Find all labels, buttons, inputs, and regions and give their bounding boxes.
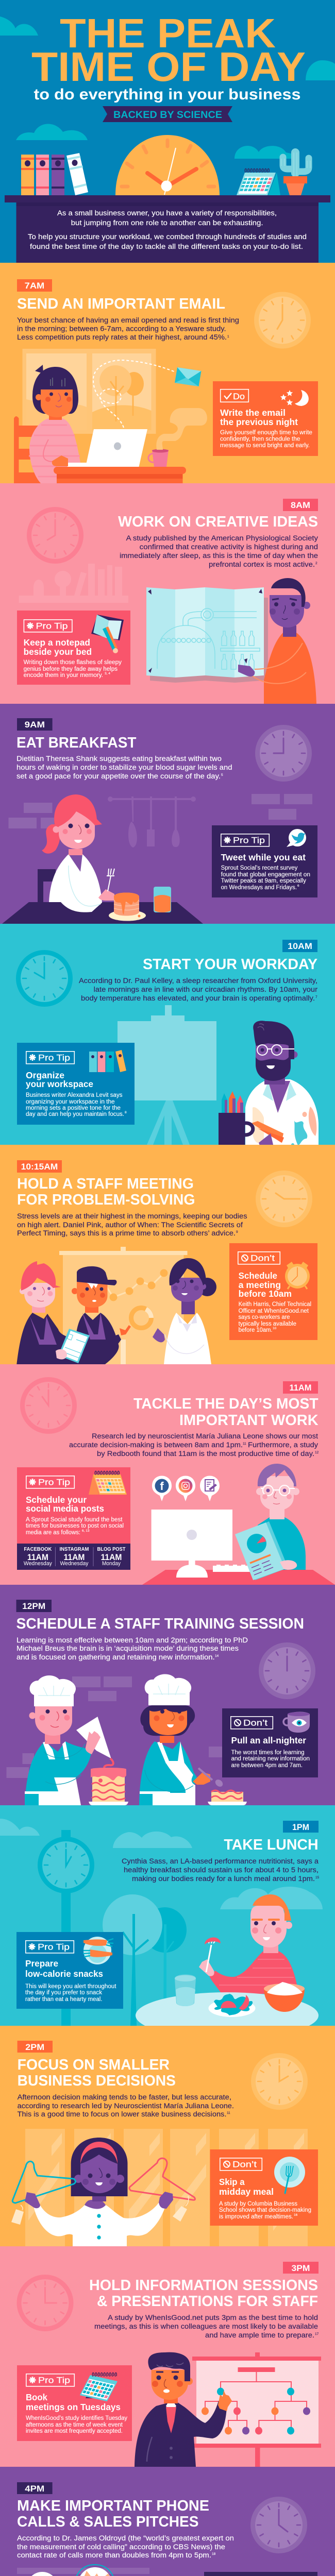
pro tip callout: your workspace xyxy=(26,1079,93,1089)
body text: 12 xyxy=(315,1451,319,1454)
pro tip callout: 6, 13 xyxy=(82,1529,90,1533)
do callout: Give yourself enough time to write xyxy=(220,430,312,436)
clock xyxy=(259,1642,315,1699)
cactus plant xyxy=(281,148,310,195)
heading xyxy=(17,2498,209,2530)
small cake xyxy=(208,1790,247,1805)
body text xyxy=(16,1636,248,1661)
heading xyxy=(133,1396,319,1429)
heading: WORK ON CREATIVE IDEAS xyxy=(118,514,318,530)
time tag xyxy=(17,279,52,292)
body text: 2 xyxy=(315,562,317,565)
body text: Learning is most effective between 10am and 2pm; according to PhD xyxy=(16,1636,248,1644)
body text: Less competition puts reply rates at their highest, around 45%. xyxy=(17,333,227,341)
desk and laptop xyxy=(52,408,207,483)
heading: TACKLE THE DAY’S MOST xyxy=(133,1396,319,1412)
don't callout: Officer at WhenIsGood.net xyxy=(239,1308,309,1314)
body text: According to Dr. Paul Kelley, a sleep researcher from Oxford University, xyxy=(79,977,317,985)
schedule table: FACEBOOK xyxy=(24,1547,52,1552)
desk xyxy=(5,195,330,263)
body text: This is a good time to focus on lower stake business decisions. xyxy=(18,2110,226,2118)
pro tip callout: Book xyxy=(26,2392,47,2402)
panel: 7AM send an email xyxy=(0,263,335,483)
don't callout xyxy=(229,1243,317,1340)
stopwatch clock on post xyxy=(38,1830,94,2026)
body text xyxy=(79,977,318,1002)
whiteboard xyxy=(118,1005,216,1145)
time tag xyxy=(17,2482,53,2494)
desk and monitor xyxy=(142,1510,335,1585)
heading: IMPORTANT WORK xyxy=(179,1412,319,1429)
pro tip callout: Organize xyxy=(26,1070,64,1080)
panel: 10:15AM staff meeting xyxy=(0,1145,335,1376)
body text: A study published by the American Physiological Society xyxy=(126,534,318,542)
schedule table: 11AM xyxy=(27,1553,48,1562)
heading: CALLS & SALES PITCHES xyxy=(17,2514,199,2530)
kitchen wall xyxy=(8,794,312,828)
body text: Stress levels are at their highest in the mornings, keeping our bodies xyxy=(17,1212,247,1220)
don't callout: Don’t xyxy=(232,2160,257,2169)
body text: Dietitian Theresa Shank suggests eating breakfast within two xyxy=(16,755,222,762)
body text: A study by WhenIsGood.net puts 3pm as the best time to hold xyxy=(108,2314,318,2321)
pro tip callout: the day if you prefer to snack xyxy=(25,1990,102,1996)
pro tip callout xyxy=(17,1467,130,1570)
pro tip callout: times for businesses to post on social xyxy=(26,1523,124,1529)
pull all-nighter callout: Don’t xyxy=(243,1718,267,1728)
body text: 7 xyxy=(315,995,317,999)
calendar xyxy=(237,168,280,195)
panel: 3PM presentations xyxy=(0,2246,335,2467)
body text: 11 xyxy=(243,1442,246,1446)
time tag xyxy=(283,1821,319,1833)
schedule table: 11AM xyxy=(64,1553,85,1562)
pro tip callout: Pro Tip xyxy=(38,2375,70,2385)
time tag: 1PM xyxy=(292,1823,309,1832)
dashed email path xyxy=(93,360,175,428)
pro tip callout: on Wednesdays and Fridays. xyxy=(221,885,297,891)
heading: START YOUR WORKDAY xyxy=(143,956,317,973)
pull all-nighter callout xyxy=(222,1708,318,1777)
schedule table: Wednesday xyxy=(60,1561,89,1567)
twitter icon xyxy=(287,829,306,847)
body text: 5 xyxy=(221,773,223,777)
pull all-nighter callout: The worst times for learning xyxy=(231,1750,305,1756)
body text xyxy=(16,755,232,780)
pro tip callout: A Sprout Social study found the best xyxy=(26,1517,123,1523)
time tag: 11AM xyxy=(290,1383,311,1393)
heading: BUSINESS DECISIONS xyxy=(18,2073,176,2089)
clock xyxy=(255,725,312,782)
do callout xyxy=(213,381,318,456)
schedule table: INSTAGRAM xyxy=(60,1547,89,1552)
shopper with hangers xyxy=(11,2138,195,2246)
panel: 2PM smaller decisions xyxy=(0,2026,335,2246)
pro tip callout: Tweet while you eat xyxy=(221,852,306,862)
title xyxy=(31,10,306,90)
person two xyxy=(56,1266,131,1370)
don't callout: before 10am. xyxy=(239,1327,272,1333)
don't callout: is improved after mealtimes. xyxy=(219,2214,293,2220)
carrots icon xyxy=(83,1937,113,1964)
pro tip callout: encode them in your memory. xyxy=(24,672,103,679)
calendar icon xyxy=(80,2372,118,2401)
salesperson with headset xyxy=(22,2565,119,2576)
pro tip callout: Keep a notepad xyxy=(24,637,90,648)
body text: 14 xyxy=(215,1654,219,1658)
clock xyxy=(27,507,83,564)
don't callout: 16 xyxy=(294,2213,298,2217)
ribbon: BACKED BY SCIENCE xyxy=(113,110,222,121)
panel: 12PM staff training xyxy=(0,1585,335,1805)
intro text xyxy=(28,209,307,250)
pro tip callout: media are as follows: xyxy=(26,1530,80,1536)
don't callout xyxy=(210,2149,318,2226)
chef two xyxy=(139,1674,224,1805)
speech bubble with dollar xyxy=(27,2572,59,2576)
body text: 9 xyxy=(236,1230,238,1234)
time tag: 2PM xyxy=(25,2043,44,2052)
don't callout xyxy=(204,2572,317,2576)
window scene xyxy=(23,349,156,434)
pro tip callout xyxy=(212,825,317,897)
body text xyxy=(94,2314,319,2339)
social bubbles: f xyxy=(160,1480,164,1493)
pro tip callout: meetings on Tuesdays xyxy=(26,2402,121,2412)
heading: MAKE IMPORTANT PHONE xyxy=(17,2498,209,2514)
clock xyxy=(20,1377,77,1434)
person three xyxy=(153,1258,216,1364)
body text: Cynthia Sass, an LA-based performance nutritionist, says a xyxy=(122,1857,319,1865)
trees xyxy=(103,1894,187,2026)
pro tip callout: Pro Tip xyxy=(38,1478,70,1487)
pro tip callout: Schedule your xyxy=(26,1495,87,1505)
schedule table: 11AM xyxy=(101,1553,122,1562)
person one xyxy=(15,1261,121,1376)
do badge: Do xyxy=(233,392,245,401)
pro tip callout: Twitter peaks at 9am, especially xyxy=(221,878,306,884)
team of three xyxy=(15,1258,216,1376)
heading: SEND AN IMPORTANT EMAIL xyxy=(17,296,225,312)
pro tip callout: morning sets a positive tone for the xyxy=(26,1105,121,1111)
don't callout: School shows that decision-making xyxy=(219,2207,311,2213)
intro text: As a small business owner, you have a variety of responsibilities, xyxy=(57,209,277,217)
body text: and is focused on gathering and retaining new information. xyxy=(16,1653,215,1661)
header panel xyxy=(0,0,335,263)
time tag xyxy=(18,2041,53,2053)
time tag xyxy=(16,1600,52,1612)
man holding blueprint xyxy=(238,578,316,704)
time tag xyxy=(282,940,317,952)
presenter xyxy=(135,2352,232,2467)
intro text: To help you structure your workload, we combed through hundreds of studies and xyxy=(28,233,307,241)
body text: confirmed that creative activity is highest during and xyxy=(140,543,318,551)
man eating xyxy=(199,1894,299,1994)
don't callout: typically less available xyxy=(239,1321,296,1327)
panel: 9AM eat breakfast xyxy=(0,704,335,924)
table and woman xyxy=(2,794,203,924)
pro tip callout: 8 xyxy=(125,1111,127,1114)
body text: Afternoon decision making tends to be faster, but less accurate, xyxy=(18,2093,231,2101)
body text: in the morning; between 6-7am, according to a Yesware study. xyxy=(17,325,226,333)
moon and stars xyxy=(280,390,309,406)
body text: 11 xyxy=(227,2111,230,2115)
subtitle: to do everything in your business xyxy=(34,86,301,103)
body text xyxy=(122,1857,320,1883)
body text: according to research led by Neuroscientist María Juliana Leone. xyxy=(18,2102,234,2110)
panel: 10AM start workday xyxy=(0,924,335,1157)
don't callout: 10 xyxy=(273,1327,277,1330)
body text: According to Dr. James Oldroyd (the “world’s greatest expert on xyxy=(17,2534,234,2542)
clouds xyxy=(0,16,335,159)
pro tip callout: Writing down those flashes of sleepy xyxy=(24,659,122,666)
body text: accurate decision-making is between 8am and 1pm. xyxy=(69,1441,243,1449)
time tag xyxy=(17,1160,62,1173)
body text: 17 xyxy=(315,2332,319,2336)
pro tip callout xyxy=(17,1043,135,1125)
clock xyxy=(250,2497,307,2553)
layer cake xyxy=(89,1768,128,1805)
heading xyxy=(18,2057,176,2089)
salad xyxy=(208,1994,256,2017)
clock xyxy=(256,1171,312,1227)
man with report xyxy=(235,1464,306,1580)
intro text: found the best time of the day to tackle all the different tasks on your to-do list. xyxy=(30,243,303,250)
don't callout: Skip a xyxy=(219,2177,245,2187)
heading: FOR PROBLEM-SOLVING xyxy=(17,1192,195,1208)
time tag: 4PM xyxy=(25,2484,44,2494)
pancakes and juice xyxy=(109,887,171,921)
body text: body temperature has elevated, and your brain is operating optimally. xyxy=(81,994,315,1002)
body text: Your best chance of having an email opened and read is first thing xyxy=(17,316,239,324)
chef one xyxy=(25,1675,113,1805)
body text: on high alert. Daniel Pink, author of When: The Scientific Secrets of xyxy=(17,1221,243,1229)
pro tip callout: Business writer Alexandra Levit says xyxy=(26,1092,123,1098)
time tag: 8AM xyxy=(291,501,310,510)
artist with mug xyxy=(219,1021,319,1157)
body text xyxy=(17,316,239,341)
time tag: 7AM xyxy=(25,281,44,291)
don't callout: before 10am xyxy=(239,1289,292,1299)
chair xyxy=(14,416,41,483)
body text xyxy=(69,1432,319,1458)
title: TIME OF DAY xyxy=(31,44,306,90)
don't callout: Keith Harris, Chief Technical xyxy=(239,1301,311,1308)
body text: Research led by neuroscientist María Juliana Leone shows our most xyxy=(92,1432,318,1440)
intro text: but jumping from one role to another can be exhausting. xyxy=(71,219,263,227)
body text: Perfect Timing, says this is a prime time to absorb others’ advice. xyxy=(17,1229,236,1237)
lunch table xyxy=(136,1974,319,2039)
body text: Michael Breus the brain is in ‘acquisition mode’ during these times xyxy=(16,1645,239,1652)
time tag: 3PM xyxy=(292,2264,310,2273)
body text: and have ample time to prepare. xyxy=(205,2331,314,2339)
pro tip callout xyxy=(16,1932,123,2009)
heading: & PRESENTATIONS FOR STAFF xyxy=(97,2293,318,2310)
body text: 1 xyxy=(227,335,229,338)
pro tip callout: genius before they fade away helps xyxy=(24,666,118,672)
brick wall xyxy=(6,1676,222,1778)
clock xyxy=(16,950,73,1007)
panel: 4PM phone calls xyxy=(0,2467,335,2576)
pull all-nighter callout: and retaining new information xyxy=(231,1756,310,1762)
don't callout: says co-workers are xyxy=(239,1314,290,1320)
body text: 18 xyxy=(212,2552,216,2556)
pro tip callout: rather than eat a hearty meal. xyxy=(25,1996,102,2003)
heading: SCHEDULE A STAFF TRAINING SESSION xyxy=(16,1616,304,1632)
pro tip callout: social media posts xyxy=(26,1503,104,1514)
hanging utensils xyxy=(108,796,196,848)
pro tip callout: Pro Tip xyxy=(36,621,68,631)
body text: contact rate of calls more than doubles from 4pm to 5pm. xyxy=(17,2551,211,2559)
pro tip callout: low-calorie snacks xyxy=(25,1969,103,1979)
don't callout: a meeting xyxy=(239,1280,281,1290)
pro tip callout: This will keep you alert throughout xyxy=(25,1984,116,1990)
body text xyxy=(17,1212,247,1237)
pull all-nighter callout: Pull an all-nighter xyxy=(231,1735,306,1745)
pro tip callout: Pro Tip xyxy=(233,836,265,845)
don't callout: A study by Columbia Business xyxy=(219,2201,297,2207)
do badge xyxy=(221,389,248,402)
pro tip callout: invites are most frequently accepted. xyxy=(26,2428,123,2434)
time tag: 10:15AM xyxy=(21,1162,58,1172)
desk clock xyxy=(115,135,220,195)
heading xyxy=(17,1176,195,1208)
pro tip callout xyxy=(17,611,130,685)
time tag xyxy=(283,499,318,511)
pro tip callout: Prepare xyxy=(25,1958,58,1969)
time tag xyxy=(283,2262,319,2274)
title: THE PEAK xyxy=(60,10,276,56)
body text: healthy breakfast should sustain us for about 4 to 5 hours, xyxy=(124,1866,319,1874)
body text: immediately after sleep, as this is the time of day when the xyxy=(120,552,318,560)
panel: 1PM take lunch xyxy=(0,1805,335,2039)
alarm clock icon xyxy=(285,1262,310,1289)
notepad icon xyxy=(91,615,124,653)
do callout: Write the email xyxy=(220,408,286,418)
pro tip callout: Pro Tip xyxy=(38,1942,70,1952)
presentation screen xyxy=(59,1247,188,1364)
body text: by Redbooth found that 11am is the most productive time of day. xyxy=(97,1450,314,1458)
body text xyxy=(18,2093,234,2118)
schedule table: Wednesday xyxy=(24,1561,52,1567)
pro tip callout: organizing your workspace in the xyxy=(26,1099,115,1105)
pull all-nighter callout: are between 4pm and 7am. xyxy=(231,1762,303,1769)
do callout: confidently, then schedule the xyxy=(220,436,300,442)
time tag: 10AM xyxy=(288,942,312,951)
body text: late mornings are in line with our circadian rhythms. By 10am, your xyxy=(94,986,318,993)
don't callout: Don’t xyxy=(250,1253,275,1263)
envelope xyxy=(175,367,201,386)
pro tip callout: day and can help you maintain focus. xyxy=(26,1111,124,1117)
water glass xyxy=(175,1974,196,2006)
schedule table xyxy=(17,1544,130,1570)
clock xyxy=(251,2053,308,2110)
shop windows xyxy=(25,2129,308,2246)
pro tip callout: Sprout Social’s recent survey xyxy=(221,865,298,871)
clouds xyxy=(0,1819,323,1909)
heading: EAT BREAKFAST xyxy=(16,735,137,751)
don't callout: midday meal xyxy=(219,2187,274,2197)
pro tip callout: 3, 4 xyxy=(105,672,110,675)
pro tip callout: Pro Tip xyxy=(38,1053,70,1062)
body text: hours of waking in order to stabilize your blood sugar levels and xyxy=(16,764,232,771)
panel: 8AM creative ideas xyxy=(0,483,335,704)
body text xyxy=(17,2534,234,2559)
schedule table: Monday xyxy=(102,1561,121,1567)
books icon xyxy=(89,1050,126,1072)
woman at laptop xyxy=(29,365,88,483)
heading: HOLD A STAFF MEETING xyxy=(17,1176,194,1192)
body text: set a good pace for your appetite over the course of the day. xyxy=(16,772,221,780)
body text: prefrontal cortex is most active. xyxy=(209,561,315,568)
background shelf xyxy=(19,564,128,603)
cup icon xyxy=(283,1711,310,1733)
body text xyxy=(120,534,318,568)
body text: 15 xyxy=(315,1876,320,1879)
heading: TAKE LUNCH xyxy=(224,1837,319,1853)
hangers xyxy=(12,2158,195,2210)
body text: meetings, as this is when colleagues are most likely to be available xyxy=(94,2323,318,2330)
pro tip callout: afternoons as the time of week event xyxy=(26,2422,123,2428)
pro tip callout: 6 xyxy=(297,884,299,888)
heading xyxy=(89,2277,318,2310)
background blinds xyxy=(17,2568,149,2576)
body text: the measurement of cold calling” according to CBS News) the xyxy=(17,2543,225,2551)
clock xyxy=(16,2275,73,2331)
books xyxy=(21,153,88,195)
ribbon xyxy=(103,106,232,122)
plate and fork icon xyxy=(274,2157,305,2193)
body text: Furthermore, a study xyxy=(248,1441,318,1449)
pro tip callout: found that global engagement on xyxy=(221,872,310,878)
do callout: message to send bright and early. xyxy=(220,443,310,449)
panel: 11AM important work xyxy=(0,1364,335,1585)
time tag: 9AM xyxy=(25,720,45,730)
don't callout: Schedule xyxy=(239,1270,277,1281)
heading: FOCUS ON SMALLER xyxy=(18,2057,170,2073)
blueprint xyxy=(146,587,268,683)
do callout: the previous night xyxy=(220,417,298,427)
time tag: 12PM xyxy=(22,1602,45,1611)
social bubbles xyxy=(152,1476,220,1501)
heading: HOLD INFORMATION SESSIONS xyxy=(89,2277,318,2294)
schedule table: BLOG POST xyxy=(97,1547,126,1552)
calendar icon xyxy=(89,1471,127,1495)
rice bowl xyxy=(264,1982,305,2012)
pro tip callout: WhenIsGood’s study identifies Tuesday xyxy=(26,2415,127,2421)
clock xyxy=(254,292,311,348)
pro tip callout xyxy=(17,2365,132,2441)
time tag xyxy=(17,718,53,731)
org chart board xyxy=(192,2352,321,2467)
body text: making our bodies ready for a lunch meal around 1pm. xyxy=(132,1875,315,1883)
pro tip callout: beside your bed xyxy=(24,647,92,657)
time tag xyxy=(283,1381,318,1394)
